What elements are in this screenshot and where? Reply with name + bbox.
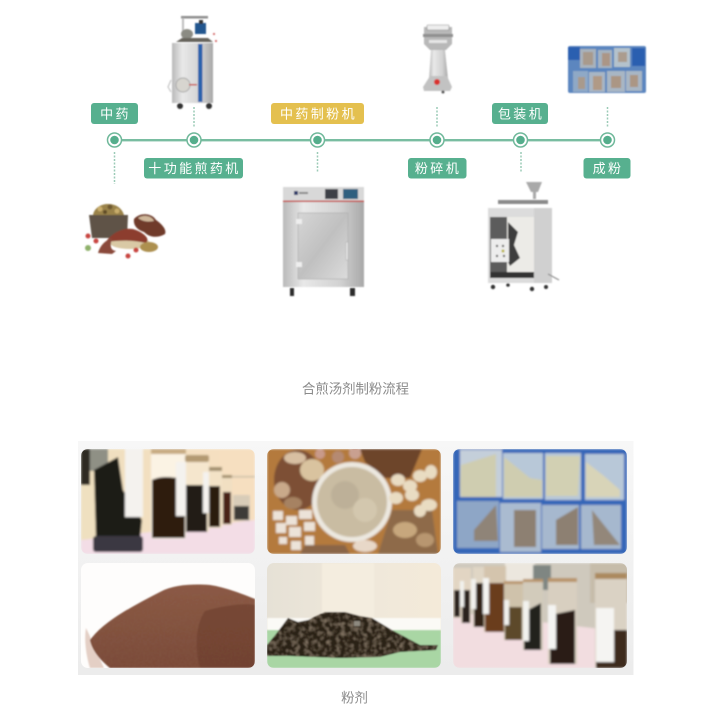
label: 十功能煎药机: 十功能煎药机 xyxy=(148,161,241,176)
photo: jar row xyxy=(453,563,630,668)
connector: 中药 xyxy=(114,152,116,184)
connector: 粉碎机 xyxy=(436,107,438,128)
node 3 xyxy=(310,133,324,147)
process flow diagram xyxy=(91,103,630,184)
label: 中药制粉机: 中药制粉机 xyxy=(280,106,357,122)
icon: packaging machine xyxy=(488,182,559,291)
icon: decoction machine xyxy=(168,16,217,109)
label: 包装机: 包装机 xyxy=(498,106,544,122)
label: 中药 xyxy=(91,103,138,124)
connector: 十功能煎药机 xyxy=(193,107,195,128)
node 1 xyxy=(108,133,122,147)
label: 中药: 中药 xyxy=(100,106,131,122)
label: 中药制粉机 xyxy=(271,103,364,124)
photo collage panel xyxy=(78,441,634,675)
label: 十功能煎药机 xyxy=(144,158,243,178)
icon: packaged powder tray xyxy=(568,46,646,93)
icon: powder-making cabinet xyxy=(283,187,364,296)
connector: 包装机 xyxy=(520,152,522,172)
panel background xyxy=(78,441,634,675)
icon: herbs xyxy=(85,204,165,258)
icon: grinder xyxy=(423,25,453,94)
label: 包装机 xyxy=(492,103,548,124)
connector: 成粉 xyxy=(606,107,608,128)
caption: powder: 粉剂 xyxy=(341,690,368,706)
photo: herb jars xyxy=(81,449,255,554)
label: 成粉 xyxy=(584,158,630,178)
connector: 中药制粉机 xyxy=(316,152,318,172)
photo: herbs with powder bowl xyxy=(267,447,441,554)
label: 粉碎机: 粉碎机 xyxy=(415,161,461,176)
timeline line xyxy=(114,139,607,141)
node 4 xyxy=(430,133,444,147)
photo: sample bags on blue xyxy=(453,449,627,554)
label: 粉碎机 xyxy=(408,158,466,178)
node 6 xyxy=(600,133,614,147)
photo: brown powder pile xyxy=(81,563,255,668)
node 5 xyxy=(514,133,528,147)
label: 成粉: 成粉 xyxy=(593,161,623,176)
node 2 xyxy=(187,133,201,147)
photo: dark granule pile xyxy=(267,563,441,668)
caption: flow: 合煎汤剂制粉流程 xyxy=(302,382,409,396)
